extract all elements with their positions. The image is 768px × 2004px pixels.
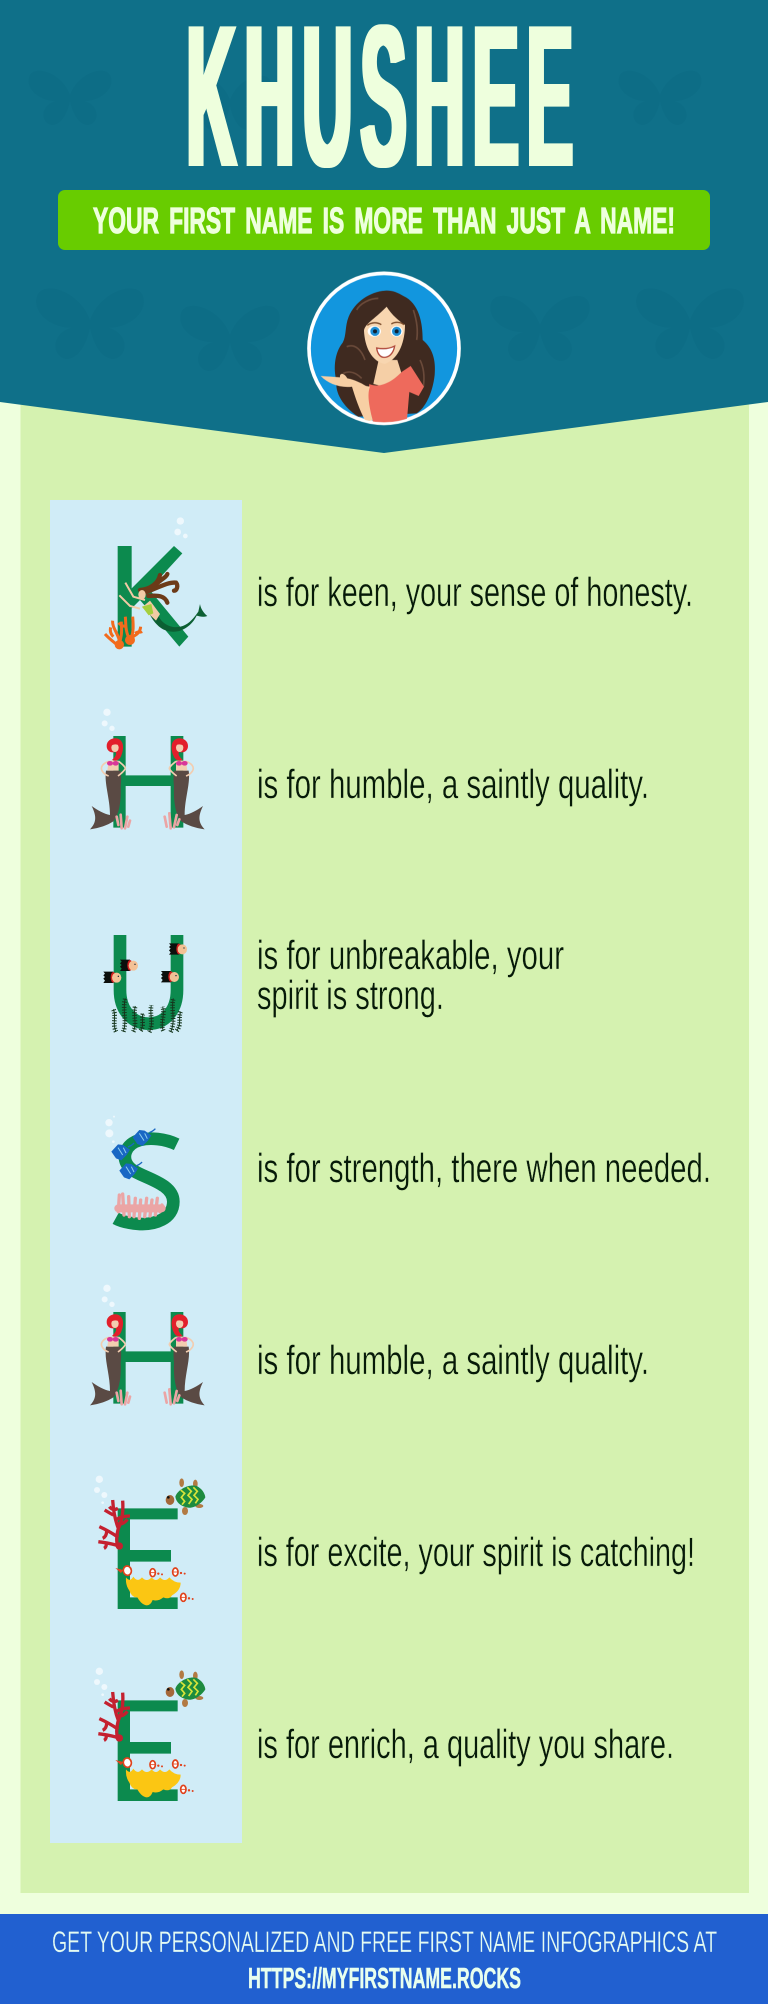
text: U row [257, 932, 564, 1018]
icon: letter S with fish and coral [105, 1116, 177, 1224]
icon: letter U with fish and seaweed [103, 935, 187, 1032]
footer [0, 1914, 768, 2004]
text: U row: is for unbreakable, your [257, 932, 564, 978]
panel: letter column [50, 500, 242, 1843]
header banner [0, 0, 768, 453]
subtitle banner [58, 190, 710, 250]
avatar [309, 273, 459, 423]
icon: letter E with turtle and coral [94, 1476, 205, 1609]
icon: letter H with mermaids [90, 709, 205, 829]
icon: letter K with mermaid and coral [105, 517, 207, 649]
icon: letter H (second) with mermaids [90, 1285, 205, 1405]
text: U row: spirit is strong. [257, 972, 444, 1018]
icon: letter E (second) with turtle and coral [94, 1668, 205, 1801]
panel: content [20, 380, 749, 1893]
footer url: HTTPS://MYFIRSTNAME.ROCKS [248, 1963, 521, 1995]
